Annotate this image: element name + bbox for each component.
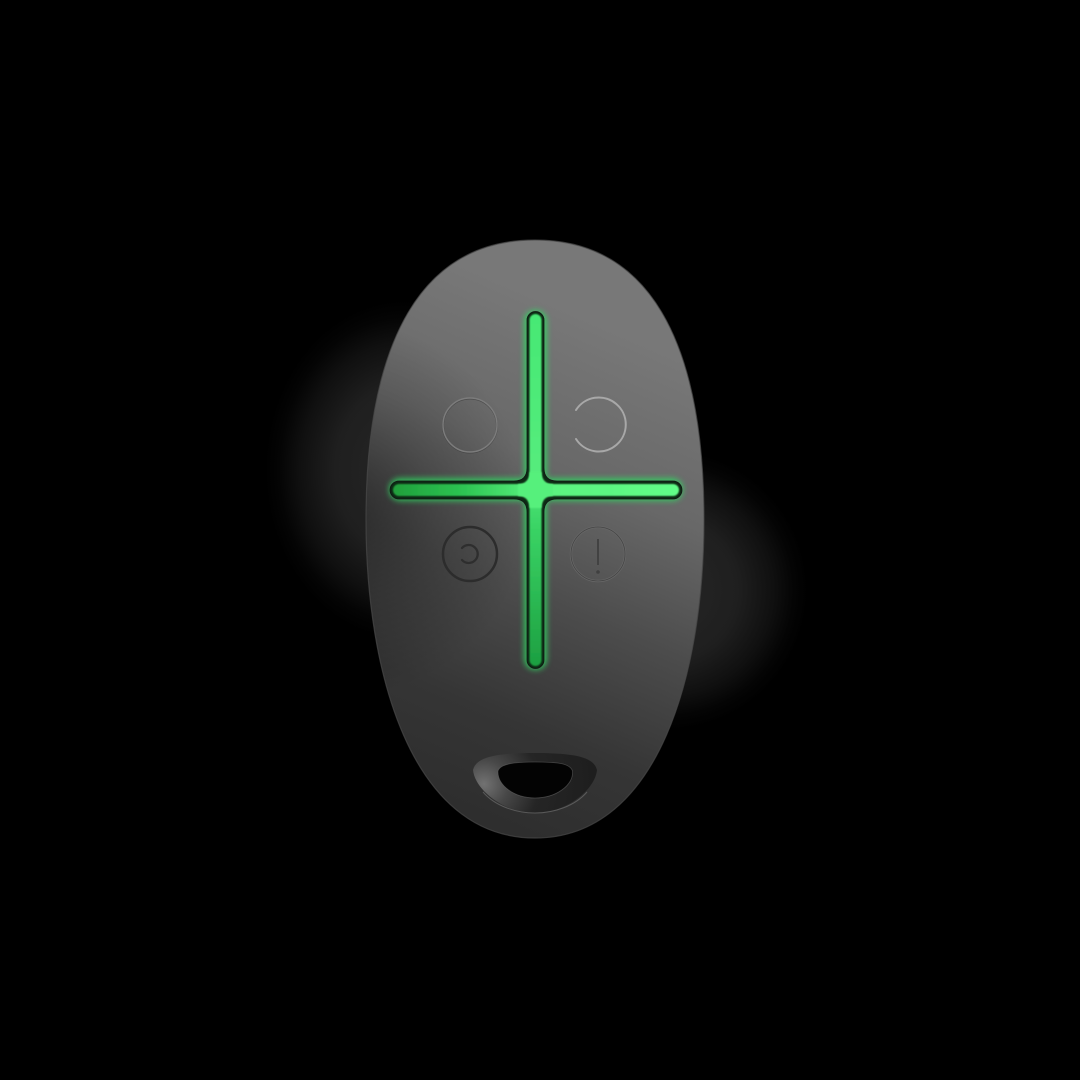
illustration: key fob on black background — [286, 239, 787, 839]
loop recess — [473, 753, 597, 813]
horizontal bar — [393, 484, 679, 496]
loop rim — [483, 792, 587, 813]
button icon: open circle — [576, 398, 626, 452]
cross glow — [389, 310, 683, 670]
green cross light — [389, 310, 683, 670]
vertical bar — [530, 314, 542, 666]
keyring loop — [473, 753, 597, 813]
loop hole — [498, 762, 573, 798]
cross centre — [518, 472, 553, 508]
cross slot — [390, 312, 682, 668]
fob body — [360, 235, 710, 845]
button icon: plain circle — [443, 398, 497, 452]
soft background halos — [265, 300, 808, 730]
button icon: exclamation mark — [571, 527, 625, 581]
button icon: circle with arc — [443, 527, 497, 581]
